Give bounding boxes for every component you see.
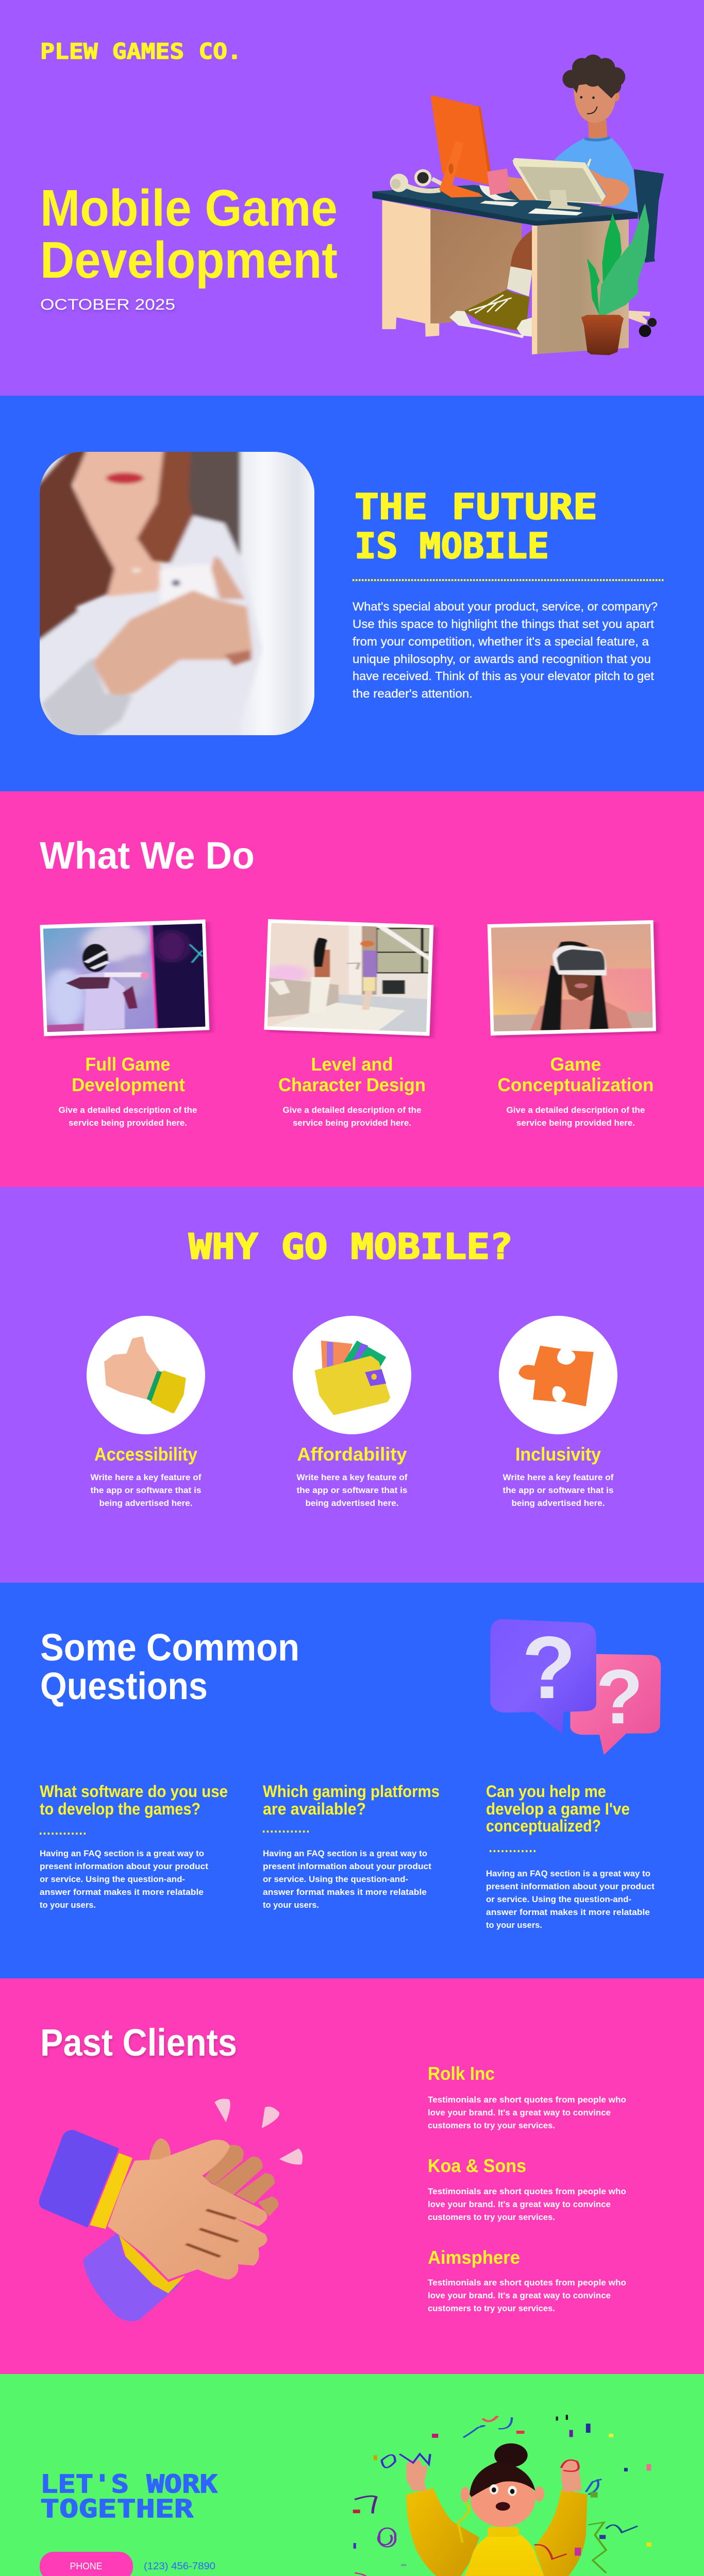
- feature: affordability: the app or software that is: [297, 1485, 407, 1495]
- heading: LET'S WORK: [40, 2470, 217, 2499]
- panel: what we do: [35, 834, 660, 1128]
- heading: Past Clients: [40, 2021, 237, 2064]
- background: blue FAQ section: [0, 1583, 704, 1978]
- background: pink services section: [0, 791, 704, 1187]
- heading: Questions: [40, 1665, 208, 1707]
- service: game conceptualization: service being provided here.: [516, 1118, 635, 1128]
- faq: software: What software do you use: [40, 1782, 228, 1801]
- head: [461, 2444, 544, 2527]
- heading: [355, 487, 597, 567]
- background: purple header section: [0, 0, 704, 396]
- feature: inclusivity: Inclusivity: [515, 1444, 601, 1465]
- faq: software: to your users.: [40, 1900, 96, 1910]
- title: Development: [40, 231, 338, 289]
- feature: inclusivity: being advertised here.: [511, 1498, 605, 1508]
- illustration: clapping hands: [39, 2099, 303, 2321]
- testimonial: aimsphere: customers to try your services.: [428, 2303, 555, 2313]
- panel: the future is mobile: [31, 447, 664, 738]
- faq: conceptualized: develop a game I've: [486, 1800, 630, 1818]
- head and hair: [562, 55, 625, 140]
- service: game conceptualization: Game: [550, 1054, 601, 1075]
- feature: accessibility: Accessibility: [94, 1444, 197, 1465]
- background: green contact section: [0, 2374, 704, 2576]
- heading: WHY GO MOBILE?: [189, 1227, 513, 1267]
- faq: conceptualized: Having an FAQ section is a great way to: [486, 1869, 650, 1878]
- service: level and character design: [278, 1054, 426, 1128]
- testimonial: aimsphere: Aimsphere: [428, 2247, 520, 2268]
- date: OCTOBER 2025: [40, 296, 175, 313]
- panel: why go mobile: [87, 1227, 617, 1508]
- icon: wallet: [316, 1341, 389, 1414]
- faq: platforms: Having an FAQ section is a great way to: [263, 1849, 427, 1858]
- title: Mobile Game: [40, 179, 338, 237]
- testimonial: rolk inc: Rolk Inc: [428, 2063, 495, 2084]
- faq: conceptualized: answer format makes it more relatable: [486, 1907, 650, 1917]
- main hand: [108, 2140, 267, 2279]
- shirt: [555, 137, 638, 212]
- background: purple why mobile section: [0, 1187, 704, 1583]
- panel: header: [40, 39, 664, 355]
- sleeves and cuffs: [39, 2130, 185, 2321]
- faq: software: present information about your product: [40, 1861, 208, 1871]
- faq: platforms: answer format makes it more relatable: [263, 1887, 427, 1897]
- faq: software: to develop the games?: [40, 1800, 200, 1818]
- feature: inclusivity: [503, 1444, 614, 1508]
- heading: IS MOBILE: [355, 526, 549, 567]
- service: game conceptualization: [498, 1054, 653, 1128]
- tablet: [513, 158, 607, 210]
- testimonial: koa and sons: Koa & Sons: [428, 2155, 526, 2176]
- testimonial: koa and sons: customers to try your services.: [428, 2212, 555, 2222]
- feature: affordability: Write here a key feature of: [297, 1472, 408, 1482]
- service: level and character design: Give a detailed description of the: [282, 1105, 422, 1115]
- feature: affordability: being advertised here.: [305, 1498, 399, 1508]
- body text: What's special about your product, service, or company?: [353, 600, 658, 613]
- faq: platforms: or service. Using the question-and-: [263, 1874, 408, 1884]
- background: blue intro section: [0, 396, 704, 791]
- sweater: [406, 2488, 588, 2576]
- desk side and back panels: [382, 200, 522, 336]
- testimonial: koa and sons: Testimonials are short quotes from people who: [428, 2187, 626, 2196]
- faq: conceptualized: conceptualized?: [486, 1817, 601, 1835]
- testimonial: aimsphere: [428, 2247, 626, 2313]
- contact row: phone: PHONE: [70, 2561, 102, 2571]
- testimonial: koa and sons: love your brand. It's a great way to convince: [428, 2199, 611, 2209]
- body text: have received. Think of this as your elevator pitch to get: [353, 669, 655, 683]
- card: woman in VR headset: [485, 920, 660, 1038]
- faq: software: [40, 1782, 228, 1910]
- testimonial: aimsphere: love your brand. It's a great way to convince: [428, 2291, 611, 2300]
- service: level and character design: Level and: [311, 1054, 393, 1075]
- heading: [40, 1626, 299, 1707]
- confetti ribbons: [355, 2416, 638, 2576]
- contact row: phone: [40, 2552, 215, 2576]
- service: full game development: Full Game: [86, 1054, 170, 1075]
- confetti pieces: [353, 2415, 651, 2576]
- headphones: [390, 169, 442, 192]
- orange monitor: [430, 95, 491, 197]
- service: level and character design: service being provided here.: [293, 1118, 411, 1128]
- testimonial: rolk inc: customers to try your services.: [428, 2121, 555, 2130]
- icon: puzzle piece: [518, 1346, 594, 1406]
- faq: conceptualized: to your users.: [486, 1920, 542, 1930]
- illustration: woman celebrating with confetti: [353, 2415, 651, 2576]
- panel: contact: [40, 2415, 651, 2576]
- body text: [353, 600, 658, 700]
- background: pink clients section: [0, 1978, 704, 2374]
- chair: [629, 169, 664, 337]
- photo: woman using phone: [31, 447, 321, 738]
- service: game conceptualization: Conceptualization: [498, 1074, 653, 1095]
- illustration: developer at desk: [373, 55, 664, 355]
- panel: past clients: [39, 2021, 626, 2321]
- feature: accessibility: Write here a key feature of: [91, 1472, 202, 1482]
- faq: platforms: [263, 1782, 440, 1910]
- heading: [40, 2470, 217, 2523]
- leg and sneakers: [449, 230, 533, 338]
- back fingers: [149, 2138, 278, 2216]
- icon: question speech bubbles: ?: [596, 1653, 643, 1740]
- testimonial: rolk inc: love your brand. It's a great way to convince: [428, 2108, 611, 2117]
- body text: Use this space to highlight the things that set you apart: [353, 617, 655, 631]
- feature: affordability: Affordability: [297, 1444, 407, 1465]
- heading: THE FUTURE: [355, 487, 597, 528]
- faq: conceptualized: present information about your product: [486, 1882, 655, 1891]
- faq: platforms: are available?: [263, 1800, 366, 1818]
- testimonial: aimsphere: Testimonials are short quotes from people who: [428, 2278, 626, 2287]
- icon: thumbs up: [106, 1337, 184, 1412]
- photo cards: [35, 919, 660, 1039]
- icon: question speech bubbles: [490, 1618, 661, 1755]
- feature: inclusivity: the app or software that is: [503, 1485, 613, 1495]
- sparks: [214, 2099, 303, 2164]
- heading: TOGETHER: [40, 2495, 193, 2523]
- testimonial: koa and sons: [428, 2155, 626, 2222]
- faq: conceptualized: or service. Using the question-and-: [486, 1894, 631, 1904]
- feature: affordability: [297, 1444, 408, 1508]
- card: players in living room: [261, 919, 438, 1038]
- potted plant: [581, 203, 649, 355]
- desk top: [373, 185, 638, 226]
- feature: accessibility: the app or software that is: [91, 1485, 201, 1495]
- heading: Some Common: [40, 1626, 299, 1669]
- body text: the reader's attention.: [353, 687, 473, 700]
- arm, cup and papers: [479, 168, 583, 215]
- forearm: [589, 168, 629, 206]
- faq: software: or service. Using the question-and-: [40, 1874, 185, 1884]
- faq: software: answer format makes it more relatable: [40, 1887, 204, 1897]
- service: full game development: [59, 1054, 197, 1128]
- icon circle backgrounds: [87, 1316, 617, 1434]
- faq: platforms: present information about your product: [263, 1861, 431, 1871]
- service: game conceptualization: Give a detailed description of the: [506, 1105, 645, 1115]
- faq: platforms: Which gaming platforms: [263, 1782, 440, 1801]
- contact row: phone: (123) 456-7890: [144, 2561, 215, 2572]
- icon: question speech bubbles: ?: [522, 1618, 576, 1717]
- company name: PLEW GAMES CO.: [40, 39, 242, 64]
- service: level and character design: Character Design: [278, 1074, 426, 1095]
- panel: some common questions: [40, 1618, 661, 1930]
- faq: conceptualized: Can you help me: [486, 1782, 606, 1801]
- title: [40, 179, 338, 289]
- service: full game development: Give a detailed description of the: [59, 1105, 197, 1115]
- heading: What We Do: [40, 834, 255, 877]
- faq: conceptualized: [486, 1782, 655, 1930]
- testimonial: rolk inc: [428, 2063, 626, 2130]
- service: full game development: Development: [72, 1074, 185, 1095]
- feature: accessibility: being advertised here.: [99, 1498, 193, 1508]
- body text: unique philosophy, or awards and recognition that you: [353, 652, 651, 666]
- testimonial: rolk inc: Testimonials are short quotes from people who: [428, 2095, 626, 2105]
- feature: accessibility: [91, 1444, 202, 1508]
- body text: from your competition, whether it's a special feature, a: [353, 635, 649, 648]
- feature: inclusivity: Write here a key feature of: [503, 1472, 614, 1482]
- card: VR player in foil room: [35, 920, 213, 1039]
- service: full game development: service being provided here.: [69, 1118, 187, 1128]
- hands: [406, 2460, 581, 2492]
- faq: platforms: to your users.: [263, 1900, 319, 1910]
- desk front panel: [532, 219, 629, 354]
- faq: software: Having an FAQ section is a great way to: [40, 1849, 204, 1858]
